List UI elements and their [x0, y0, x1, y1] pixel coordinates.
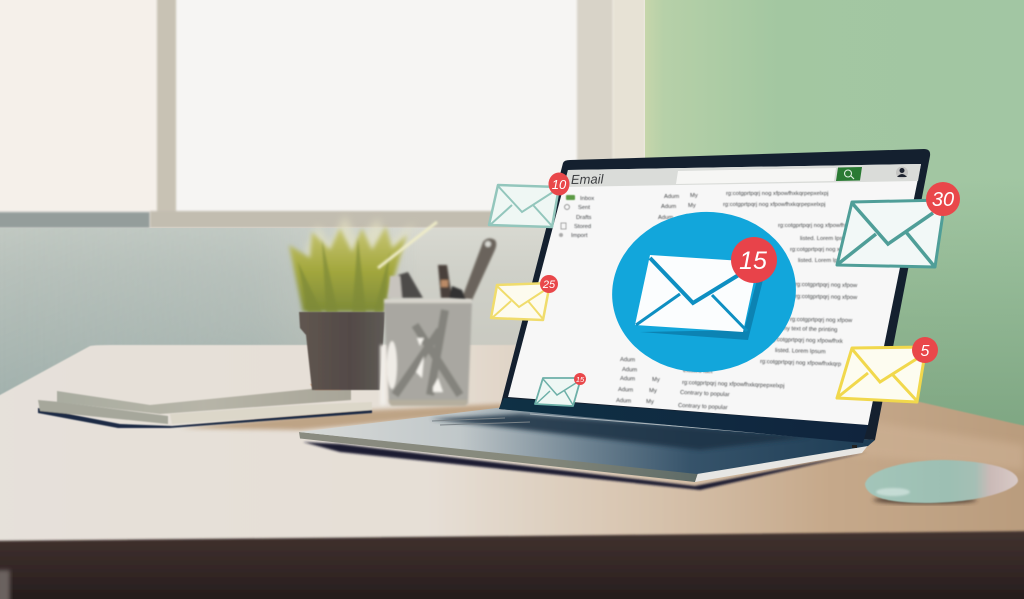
email list: My [649, 388, 657, 394]
email list: rg:cotgprtpqrj nog xfpowfhxkqrpepxelxpj [778, 223, 880, 229]
email list: rg:cotgprtpqrj nog xfpowfhx [790, 247, 860, 253]
email list: Adum [656, 225, 671, 231]
main envelope icon [635, 237, 777, 340]
sidebar menu: Stored [574, 224, 591, 230]
background: window and wall [0, 0, 645, 396]
envelope: 30 [837, 182, 960, 267]
email list: My [686, 214, 694, 220]
email list: rg:cotgprtpqrj nog xfpowfhxkqrp [760, 359, 841, 368]
email list: rg:cotgprtpqrj nog xfpow [795, 294, 858, 301]
email list: rg:cotgprtpqrj nog xfpowfhxkqrpepxelxpj [726, 191, 828, 197]
email list: My [652, 377, 660, 383]
sidebar menu: Import [571, 233, 588, 239]
sidebar menu [559, 195, 594, 239]
email list: Adum [661, 204, 676, 210]
envelope: 10 [489, 172, 570, 227]
email list: rg:cotgprtpqrj nog xfpow [795, 282, 858, 289]
mouse [865, 460, 1018, 504]
email list: Adum [616, 398, 631, 405]
lid bezel [499, 149, 930, 440]
app name: Email [571, 171, 605, 187]
badge: 15: 15 [739, 247, 767, 275]
email list: listed. Lorem Ipsum [775, 348, 826, 355]
envelope: 5 [837, 337, 938, 402]
pens in cup [388, 238, 496, 300]
email list: my text of the printing [782, 326, 838, 333]
sidebar menu: Inbox [580, 196, 594, 202]
badge: 15 [731, 237, 777, 283]
email list: My [688, 203, 696, 209]
central blue circle [604, 203, 804, 381]
laptop lid and screen [499, 149, 930, 443]
badge: 30: 30 [932, 189, 954, 211]
email list [616, 191, 880, 411]
email list: rg:cotgprtpqrj nog xfpowfhxkqrpepxelxpj [723, 202, 825, 208]
envelope: 15 small [535, 373, 586, 406]
email list: Adum [618, 387, 633, 394]
email list: listed. Lorem Ipsum [798, 258, 849, 264]
background: green wall [645, 0, 1024, 440]
plant pot [299, 312, 385, 390]
badge: 25: 25 [542, 279, 556, 291]
email list: rg:cotgprtpqrj nog xfpowfhxkqrpepxelxpj [682, 380, 785, 390]
email list: rg:cotgprtpqrj nog xfpowfhxk [770, 337, 843, 345]
email list: Adum [620, 376, 635, 383]
user icon [896, 166, 908, 178]
email list: rg:cotgprtpqrj nog xfpow [790, 317, 853, 324]
email list: Adum [620, 357, 635, 364]
screen surface [508, 164, 921, 425]
badge: 10: 10 [552, 177, 567, 192]
email list: existed fact [683, 368, 713, 375]
envelope: 25 [491, 275, 558, 320]
desk surface [0, 345, 1024, 599]
sidebar menu: Sent [578, 205, 590, 211]
email list: Contrary to popular [680, 390, 730, 398]
email list: My [646, 399, 654, 405]
books and tablet [38, 384, 372, 428]
badge: 15 small: 15 [576, 375, 585, 384]
badge: 5: 5 [921, 343, 930, 360]
email list: Adum [658, 215, 673, 221]
laptop base [299, 407, 875, 490]
email list: listed. Lorem Ipsum [800, 236, 851, 242]
search button [836, 167, 862, 181]
email list: Adum [622, 367, 637, 374]
tan shadow by cup [180, 404, 520, 430]
plant [289, 215, 437, 312]
email list: Contrary to popular [678, 403, 728, 411]
pen cup [380, 299, 472, 406]
email list: Adum [664, 194, 679, 200]
email list: My [690, 193, 698, 199]
toolbar [564, 164, 921, 187]
sidebar menu: Drafts [576, 215, 592, 221]
